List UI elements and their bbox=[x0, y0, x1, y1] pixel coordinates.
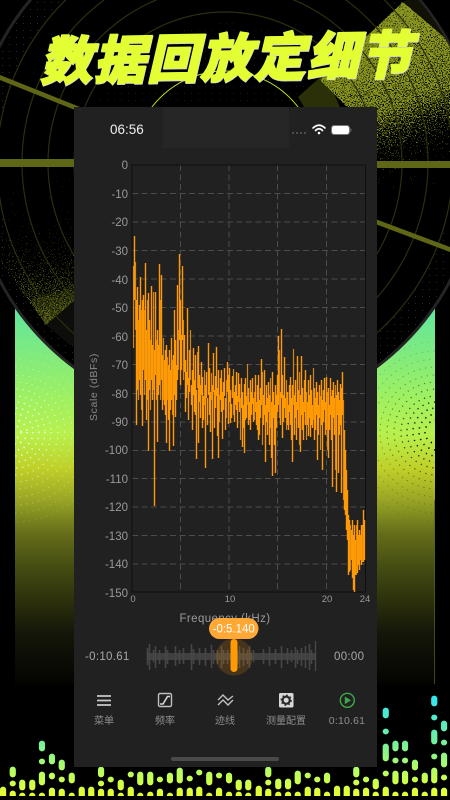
tab: play bbox=[329, 693, 365, 727]
y axis labels: 0 bbox=[122, 160, 128, 172]
equalizer bars bbox=[0, 696, 447, 799]
y axis labels: -140 bbox=[105, 559, 128, 571]
tab: measure config bbox=[266, 693, 306, 727]
scrubber handle bbox=[230, 639, 238, 672]
scrubber halo bbox=[216, 638, 252, 676]
tab bar bbox=[94, 693, 365, 727]
tab: play: 0:10.61 bbox=[329, 715, 365, 727]
tab: trace bbox=[215, 695, 235, 727]
tab: menu bbox=[94, 696, 114, 727]
home indicator bbox=[171, 757, 279, 761]
title: 数据回放定细节 bbox=[37, 15, 426, 97]
horizontal and diagonal olive bands bbox=[0, 75, 450, 252]
y axis labels: -10 bbox=[111, 189, 128, 201]
playback timeline bbox=[85, 618, 364, 676]
chart: frequency spectrum bbox=[88, 160, 370, 625]
status bar bbox=[110, 122, 351, 137]
x axis labels: 24 bbox=[360, 594, 370, 605]
concentric rings bbox=[0, 0, 450, 334]
y axis labels: -70 bbox=[111, 360, 128, 372]
phone screen bbox=[74, 107, 377, 767]
icon: battery bbox=[332, 126, 351, 134]
y axis labels: -80 bbox=[111, 389, 128, 401]
x axis title: Frequency (kHz) bbox=[180, 613, 270, 625]
tab: trace: 迹线 bbox=[215, 714, 235, 727]
y axis labels: -30 bbox=[111, 246, 128, 258]
y axis labels: -40 bbox=[111, 275, 128, 287]
olive sector: lower left bbox=[1, 180, 74, 345]
tab: frequency bbox=[155, 694, 175, 727]
radar disc bbox=[0, 0, 450, 369]
tab: measure config: 测量配置 bbox=[266, 714, 306, 727]
olive sector: upper right bbox=[298, 0, 450, 200]
title: 数据回放定细节 bbox=[36, 14, 426, 96]
time bubble: -0:5.140 bbox=[213, 624, 255, 636]
spectrum trace bbox=[134, 236, 364, 592]
tab: menu: 菜单 bbox=[94, 715, 114, 727]
icon: wifi bbox=[313, 125, 325, 134]
bright inner ring bbox=[133, 71, 317, 255]
status bar: 06:56 bbox=[110, 122, 144, 137]
bottom black strip bbox=[0, 796, 450, 800]
y axis labels: -100 bbox=[105, 445, 128, 457]
y axis labels: -90 bbox=[111, 417, 128, 429]
y axis labels: -130 bbox=[105, 531, 128, 543]
y axis labels: -110 bbox=[106, 474, 128, 486]
time bubble bbox=[209, 618, 258, 639]
waveform bbox=[148, 641, 316, 671]
y axis labels: -60 bbox=[111, 332, 128, 344]
x axis labels bbox=[130, 594, 370, 605]
plot grid bbox=[132, 165, 365, 592]
notch area bbox=[163, 107, 289, 148]
remaining time: 00:00 bbox=[334, 651, 364, 663]
y axis labels: -150 bbox=[105, 588, 128, 600]
y axis title: Scale (dBFs) bbox=[88, 353, 100, 421]
y axis labels: -120 bbox=[105, 502, 128, 514]
x axis labels: 20 bbox=[322, 594, 332, 605]
y axis labels bbox=[105, 160, 128, 600]
panel: left gradient strip bbox=[15, 308, 74, 674]
panel: right gradient strip bbox=[377, 308, 435, 684]
y axis labels: -50 bbox=[111, 303, 128, 315]
tab: frequency: 频率 bbox=[155, 714, 175, 727]
x axis labels: 10 bbox=[225, 594, 235, 605]
x axis labels: 0 bbox=[130, 594, 136, 605]
elapsed time: -0:10.61 bbox=[85, 651, 130, 663]
y axis labels: -20 bbox=[111, 217, 128, 229]
